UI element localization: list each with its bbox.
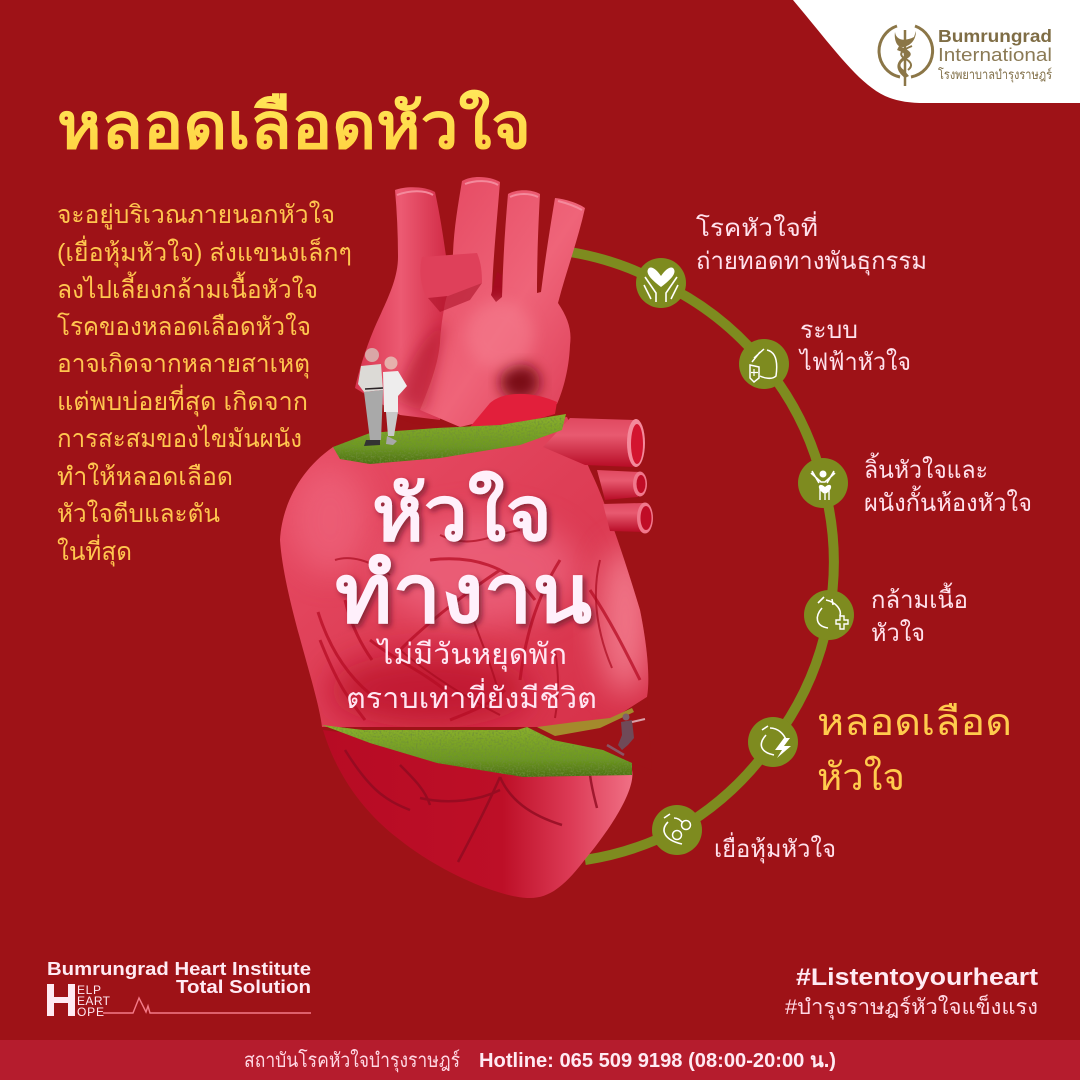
heart institute logo: OPE bbox=[77, 1005, 104, 1019]
label: valves and septum bbox=[864, 452, 1032, 517]
heart: lower apex bbox=[323, 730, 632, 898]
central headline: หัวใจ bbox=[372, 470, 552, 557]
left description text block: ทำให้หลอดเลือด bbox=[57, 462, 233, 491]
label: hereditary: ถ่ายทอดทางพันธุกรรม bbox=[696, 248, 927, 276]
central subtitle: ตราบเท่าที่ยังมีชีวิต bbox=[346, 678, 597, 715]
heart institute logo: ELP bbox=[77, 983, 101, 997]
node 1: hands holding heart bbox=[636, 258, 686, 308]
left description text block: ลงไปเลี้ยงกล้ามเนื้อหัวใจ bbox=[57, 271, 318, 304]
heart: great vessels bbox=[355, 177, 585, 427]
central subtitle bbox=[346, 637, 597, 715]
logo: Bumrungrad International: International bbox=[938, 45, 1052, 65]
left description text block: หัวใจตีบและตัน bbox=[57, 499, 220, 528]
left description text block: จะอยู่บริเวณภายนอกหัวใจ bbox=[57, 200, 335, 230]
gap between slices bbox=[553, 697, 652, 770]
logo: Bumrungrad International bbox=[879, 26, 1052, 86]
footer bar bbox=[0, 1040, 1080, 1080]
hashtags: #Listentoyourheart bbox=[796, 964, 1038, 991]
logo: Bumrungrad International: Bumrungrad bbox=[938, 26, 1052, 46]
label: valves and septum: ลิ้นหัวใจและ bbox=[864, 452, 988, 484]
left description text block: อาจเกิดจากหลายสาเหตุ bbox=[57, 350, 310, 379]
left description text block bbox=[57, 200, 352, 567]
heart: main body upper bbox=[280, 417, 648, 727]
node 3: person with heart bbox=[798, 458, 848, 508]
label: hereditary bbox=[696, 211, 927, 276]
top grass slab bbox=[333, 414, 566, 464]
label: hereditary: โรคหัวใจที่ bbox=[696, 211, 818, 242]
white logo corner panel bbox=[793, 0, 1080, 103]
central headline bbox=[335, 470, 592, 640]
label: coronary arteries highlighted bbox=[817, 702, 1012, 799]
central headline: ทำงาน bbox=[335, 549, 592, 640]
label: heart muscle bbox=[871, 582, 968, 647]
label: electrical system: ไฟฟ้าหัวใจ bbox=[798, 348, 911, 376]
bottom grass slab bbox=[322, 708, 634, 777]
label: pericardium: เยื่อหุ้มหัวใจ bbox=[714, 832, 836, 864]
anatomical heart illustration bbox=[280, 177, 653, 898]
label: electrical system bbox=[798, 317, 911, 376]
node 4: heart muscle with plus bbox=[804, 590, 854, 640]
central subtitle: ไม่มีวันหยุดพัก bbox=[376, 637, 567, 672]
heart institute logo bbox=[47, 959, 311, 1019]
left description text block: ในที่สุด bbox=[57, 534, 132, 567]
figure: running person bbox=[607, 714, 645, 755]
left description text block: แต่พบบ่อยที่สุด เกิดจาก bbox=[57, 384, 308, 417]
label: electrical system: ระบบ bbox=[800, 317, 858, 344]
heart institute logo: EART bbox=[77, 994, 111, 1008]
hashtags bbox=[785, 964, 1038, 1020]
footer bar: Hotline: 065 509 9198 (08:00-20:00 น.) bbox=[479, 1050, 836, 1072]
left description text block: โรคของหลอดเลือดหัวใจ bbox=[57, 312, 311, 341]
node 2: heart conduction icon bbox=[739, 339, 789, 389]
heart institute logo: Total Solution bbox=[176, 977, 311, 997]
label: coronary arteries highlighted: หัวใจ bbox=[817, 756, 905, 799]
label: coronary arteries highlighted: หลอดเลือด bbox=[817, 702, 1012, 744]
label: heart muscle: กล้ามเนื้อ bbox=[871, 582, 968, 614]
heart: arteries stubs on the right bbox=[543, 418, 653, 534]
label: valves and septum: ผนังกั้นห้องหัวใจ bbox=[864, 485, 1032, 517]
hashtags: #บำรุงราษฎร์หัวใจแข็งแรง bbox=[785, 993, 1038, 1020]
title: หลอดเลือดหัวใจ bbox=[57, 89, 531, 162]
node 6: heart with gears bbox=[652, 805, 702, 855]
logo: Bumrungrad International: โรงพยาบาลบำรุงราษฎร์ bbox=[938, 67, 1052, 83]
timeline ring bbox=[570, 252, 834, 860]
node 5: heart with lightning bbox=[748, 717, 798, 767]
heart institute logo: Bumrungrad Heart Institute bbox=[47, 959, 311, 979]
figures: elderly couple bbox=[358, 348, 407, 446]
footer bar: สถาบันโรคหัวใจบำรุงราษฎร์ bbox=[244, 1049, 460, 1073]
left description text block: การสะสมของไขมันผนัง bbox=[57, 424, 302, 453]
label: heart muscle: หัวใจ bbox=[871, 619, 925, 647]
left description text block: (เยื่อหุ้มหัวใจ) ส่งแขนงเล็กๆ bbox=[57, 235, 352, 268]
